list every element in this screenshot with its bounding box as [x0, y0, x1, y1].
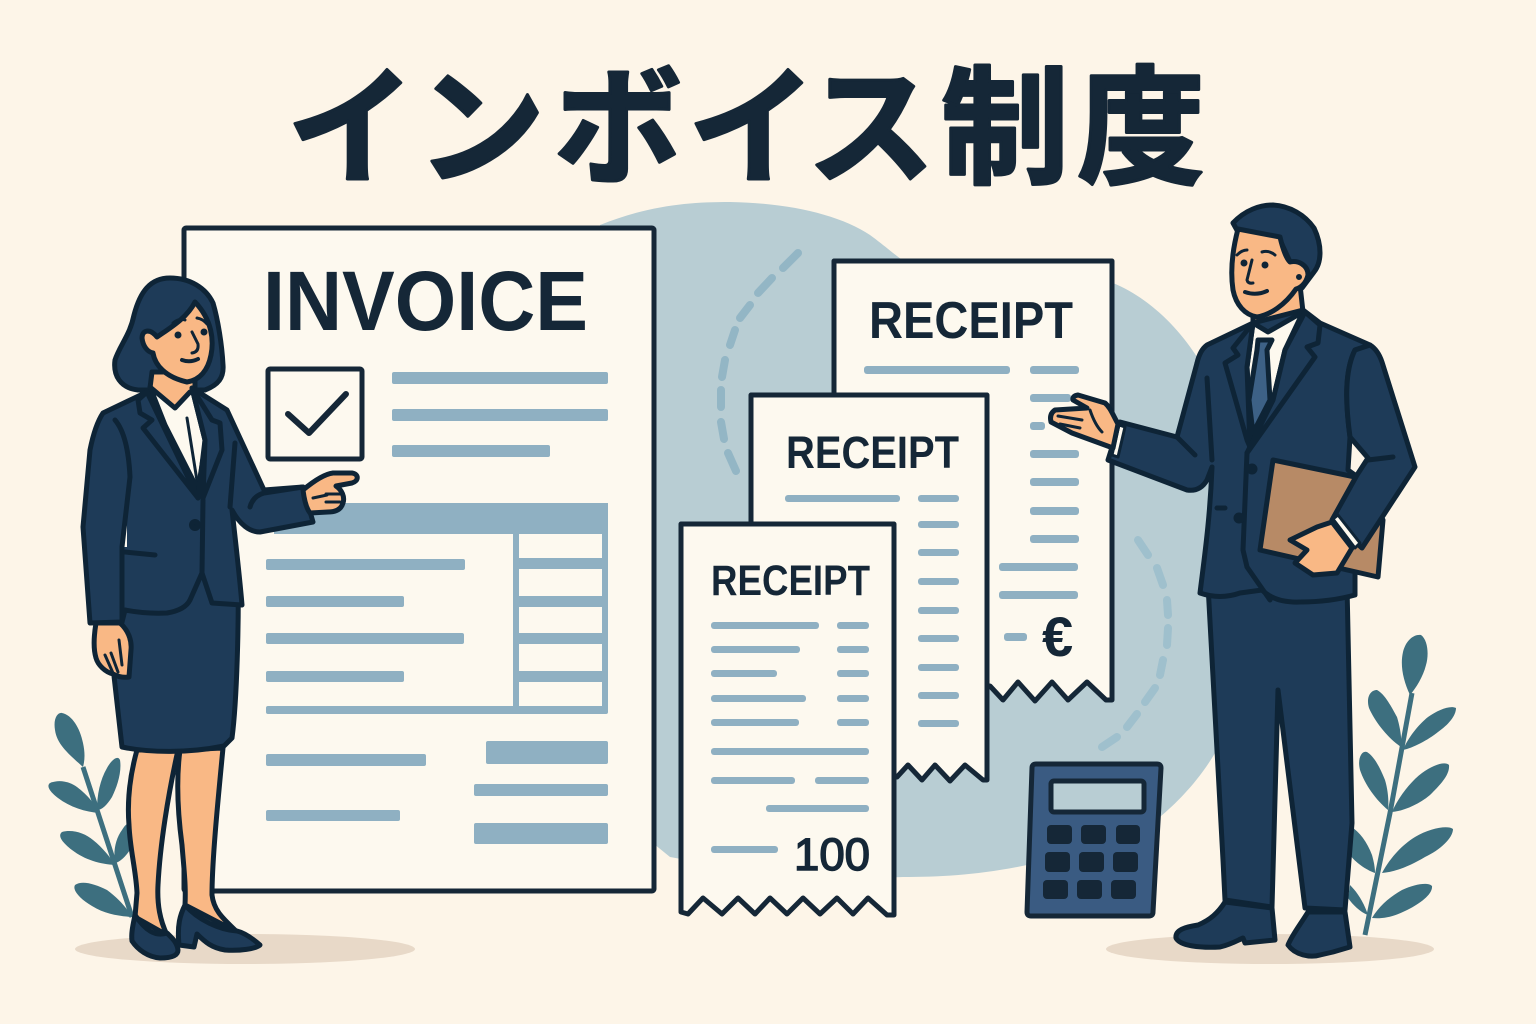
hand finger lines [105, 640, 122, 673]
open hand lines [1058, 410, 1102, 432]
sleeve gap [123, 513, 127, 547]
jacket lapels [138, 388, 222, 498]
plant: left [48, 713, 132, 917]
receipt: front: RECEIPT [711, 557, 870, 605]
skirt [112, 570, 238, 751]
ground shadow: left [75, 934, 415, 964]
invoice document [184, 228, 654, 891]
shoes [1176, 902, 1350, 956]
title: インボイス制度 [287, 25, 1205, 210]
lower hand [94, 623, 131, 677]
checkbox icon [268, 369, 362, 459]
invoice heading: INVOICE [263, 254, 588, 348]
jacket [83, 388, 313, 623]
invoice header lines [392, 372, 608, 457]
receipt: front: 100 [794, 829, 870, 880]
right arm [1332, 345, 1415, 548]
neck [150, 372, 195, 410]
elbow line [1368, 457, 1393, 460]
background blob [600, 202, 1227, 878]
lapels [1225, 312, 1320, 453]
dashed cycle arrow: lower [1102, 540, 1168, 747]
legs [128, 748, 237, 935]
shoes [132, 905, 260, 958]
jacket seams [1177, 378, 1270, 600]
dashed cycle arrow: upper [721, 253, 798, 471]
pointing hand [303, 473, 357, 513]
face [142, 302, 212, 382]
receipt: back: € [1042, 605, 1073, 668]
calculator icon [1027, 764, 1161, 916]
face [1232, 229, 1308, 317]
man figure [1050, 205, 1415, 956]
plant: right [1348, 635, 1456, 935]
pointing hand fingers [313, 494, 340, 502]
receipt: front [681, 524, 894, 915]
jacket buttons [1236, 466, 1255, 521]
folder [1260, 460, 1383, 577]
trousers [1208, 585, 1352, 910]
shirt cuff: holding arm [1333, 515, 1360, 548]
holding hand [1290, 522, 1352, 575]
receipt: back: RECEIPT [869, 292, 1073, 350]
hair [1233, 205, 1320, 288]
jacket button [192, 522, 198, 528]
invoice totals [266, 741, 608, 844]
neck [1253, 285, 1303, 332]
jacket [1108, 310, 1370, 602]
shirt centre line [187, 418, 198, 487]
receipt: middle [751, 395, 987, 781]
invoice table [266, 503, 608, 714]
woman figure [83, 278, 357, 958]
receipt: back [834, 261, 1112, 701]
tie [1249, 340, 1272, 433]
shirt [1247, 312, 1303, 440]
jacket seams [115, 420, 303, 622]
hair [115, 278, 223, 390]
shirt [150, 387, 206, 490]
receipt: middle: RECEIPT [786, 427, 959, 478]
open hand [1050, 395, 1118, 448]
face details [1237, 250, 1300, 294]
face details [173, 318, 207, 361]
ground shadow: right [1106, 934, 1434, 964]
shirt cuff: open arm [1112, 425, 1125, 457]
